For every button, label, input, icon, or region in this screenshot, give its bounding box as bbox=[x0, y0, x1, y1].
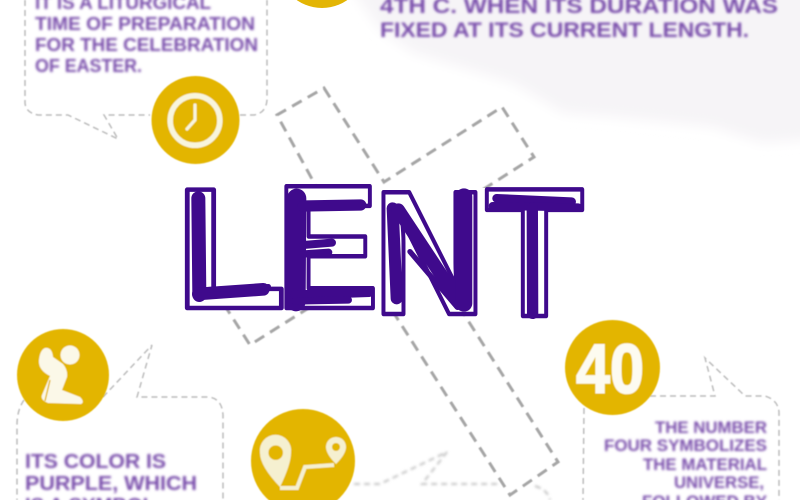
bubble outline bbox=[17, 345, 223, 500]
text block: liturgical time bbox=[35, 0, 258, 76]
text block: colour purple: PURPLE, WHICH bbox=[25, 473, 197, 495]
dashed cross outline bbox=[218, 88, 558, 495]
icon: route with map pins bbox=[251, 409, 355, 500]
bubble outline bbox=[25, 0, 267, 139]
text block: number forty: THE NUMBER bbox=[655, 419, 767, 437]
speech bubble: route bbox=[354, 452, 550, 500]
title letters: T bbox=[485, 149, 584, 355]
icon circle: top cut off bbox=[278, 0, 366, 8]
text block: liturgical time: OF EASTER. bbox=[35, 56, 142, 76]
white band behind title bbox=[187, 188, 585, 300]
title letters: L bbox=[175, 153, 287, 345]
title letters bbox=[175, 148, 584, 355]
text block: liturgical time: TIME OF PREPARATION bbox=[35, 14, 255, 34]
text block: colour purple bbox=[25, 451, 197, 500]
icon: clock bbox=[152, 76, 240, 164]
title: LENT bbox=[175, 148, 584, 355]
text block: liturgical time: FOR THE CELEBRATION bbox=[35, 35, 258, 55]
icon: kneeling figure bbox=[17, 329, 109, 421]
text block: number forty: THE MATERIAL bbox=[643, 456, 767, 474]
icon: number 40: 40 bbox=[576, 330, 644, 408]
grey background blob bbox=[345, 0, 800, 143]
text block: number forty: FOUR SYMBOLIZES bbox=[604, 437, 767, 455]
speech bubble: liturgical time bbox=[25, 0, 267, 139]
speech bubble: number forty bbox=[583, 358, 779, 500]
icon: number 40 bbox=[565, 320, 660, 415]
text block: number forty bbox=[604, 419, 767, 500]
speech bubble: colour purple bbox=[17, 345, 223, 500]
title letters: E bbox=[276, 148, 379, 346]
text block: history of duration bbox=[380, 0, 778, 42]
text block: history of duration: FIXED AT ITS CURRENT LENGTH. bbox=[380, 19, 749, 42]
text block: number forty: UNIVERSE, bbox=[674, 474, 764, 492]
scribble shading bbox=[198, 197, 578, 313]
text block: colour purple: ITS COLOR IS bbox=[25, 451, 166, 473]
title letters: N bbox=[373, 154, 486, 352]
bubble outline bbox=[583, 358, 779, 500]
